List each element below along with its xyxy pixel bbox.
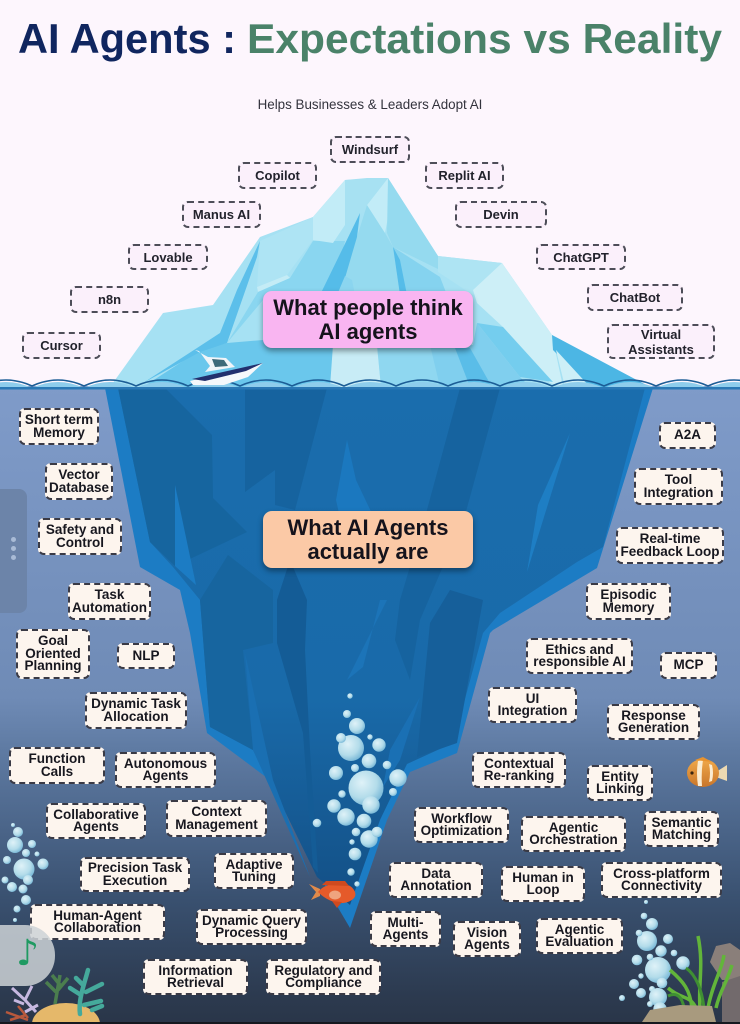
tag: Dynamic Task Allocation: Allocation <box>103 708 169 724</box>
tag: UI Integration <box>488 687 577 723</box>
tag: ChatGPT <box>536 244 626 270</box>
tag: UI Integration: Integration <box>498 703 567 718</box>
icon: orange fish <box>309 881 355 908</box>
tag: Agentic Orchestration <box>521 816 626 852</box>
tag: Regulatory and Compliance: Regulatory and <box>274 963 373 978</box>
tag: Semantic Matching: Semantic <box>651 815 712 830</box>
tag: Episodic Memory: Episodic <box>600 587 657 602</box>
tag: Goal Oriented Planning <box>16 629 90 679</box>
tag: MCP <box>660 652 717 679</box>
tag: Autonomous Agents: Agents <box>143 768 188 783</box>
tag: Task Automation: Automation <box>72 600 147 614</box>
tag: Agentic Evaluation: Evaluation <box>545 934 614 949</box>
tag: Function Calls: Calls <box>41 764 73 778</box>
tag: Tool Integration: Integration <box>644 484 713 500</box>
tag: NLP: NLP <box>132 648 160 663</box>
tag: Episodic Memory: Memory <box>603 600 654 614</box>
heading: what people think <box>263 291 473 348</box>
tag: Ethics and responsible AI <box>526 638 633 674</box>
tag: Regulatory and Compliance <box>266 959 381 995</box>
tag: Contextual Re-ranking: Contextual <box>484 756 554 771</box>
tag: Response Generation <box>607 704 700 740</box>
tag: Autonomous Agents <box>115 752 216 788</box>
side handle overlay <box>0 489 27 613</box>
tag: Devin: Devin <box>483 207 519 222</box>
tag: Windsurf <box>330 136 410 163</box>
tag: Human in Loop: Human in <box>512 870 574 885</box>
tag: Dynamic Task Allocation: Dynamic Task <box>91 696 181 711</box>
tag: Precision Task Execution: Precision Task <box>88 860 182 875</box>
tag: Virtual Assistants: Assistants <box>628 342 694 356</box>
tag: Context Management: Context <box>191 804 242 819</box>
tag: Data Annotation: Annotation <box>400 878 472 893</box>
tag: Cross-platform Connectivity: Connectivity <box>621 878 702 893</box>
tag: Vector Database: Vector <box>58 467 100 482</box>
tag: ChatBot: ChatBot <box>610 290 660 305</box>
tag: Response Generation: Response <box>621 708 686 723</box>
tag: Human-Agent Collaboration: Human-Agent <box>53 908 142 923</box>
tag: Short term Memory <box>19 408 99 445</box>
tag: Response Generation: Generation <box>618 720 689 735</box>
tag: Tool Integration: Tool <box>665 472 692 487</box>
tag: Vision Agents: Vision <box>467 925 507 940</box>
tag: Real-time Feedback Loop: Real-time <box>640 531 700 546</box>
tag: Entity Linking <box>587 765 653 801</box>
tag: Contextual Re-ranking <box>472 752 566 788</box>
left bubbles <box>2 823 48 922</box>
tag: Entity Linking: Entity <box>601 769 639 784</box>
tag: Goal Oriented Planning: Oriented <box>25 646 81 661</box>
tag: Dynamic Task Allocation <box>85 692 187 729</box>
tag: Copilot <box>238 162 317 189</box>
title <box>18 15 723 62</box>
tag: Vector Database: Database <box>49 480 109 494</box>
tag: Function Calls: Function <box>28 751 86 766</box>
tag: Context Management <box>166 800 267 837</box>
tag: Cursor: Cursor <box>40 338 83 353</box>
panel: what people think tags <box>22 136 715 359</box>
tag: Autonomous Agents: Autonomous <box>124 756 207 771</box>
heading: what AI agents actually are <box>263 511 473 568</box>
tag: Adaptive Tuning: Tuning <box>232 869 276 884</box>
icon: music note button: ♪ <box>16 933 39 974</box>
tag: Vision Agents: Agents <box>464 937 510 952</box>
tag: n8n: n8n <box>98 292 121 307</box>
heading: what people think: AI agents <box>318 318 418 344</box>
tag: Safety and Control: Safety and <box>46 522 114 537</box>
tag: Multi-Agents: Agents <box>383 927 428 942</box>
tag: UI Integration: UI <box>526 691 539 706</box>
tag: Entity Linking: Linking <box>596 781 644 796</box>
title: AI Agents : <box>18 15 236 62</box>
heading: what people think: What people think <box>273 294 463 320</box>
tag: Agentic Orchestration: Agentic <box>549 820 598 835</box>
tag: ChatGPT: ChatGPT <box>553 250 609 264</box>
tag: Cross-platform Connectivity <box>601 862 722 898</box>
tag: Safety and Control <box>38 518 122 555</box>
panel: what AI agents actually are tags <box>9 408 724 995</box>
iceberg below water <box>105 388 653 928</box>
tag: Cross-platform Connectivity: Cross-platform <box>613 866 710 881</box>
tag: Human-Agent Collaboration <box>30 904 165 940</box>
icon: rocks and seaweed <box>642 936 740 1022</box>
bottom edge bar <box>0 1022 740 1024</box>
icon: clownfish <box>687 757 727 787</box>
tag: Data Annotation: Data <box>421 866 451 881</box>
tag: Semantic Matching: Matching <box>652 827 711 842</box>
tag: Manus AI: Manus AI <box>193 207 250 222</box>
tag: Collaborative Agents: Agents <box>73 819 119 834</box>
tag: Short term Memory: Short term <box>25 412 93 427</box>
tag: Precision Task Execution: Execution <box>103 872 167 888</box>
tag: Workflow Optimization: Workflow <box>431 811 492 826</box>
tag: Information Retrieval: Retrieval <box>167 975 224 990</box>
tag: Dynamic Query Processing: Dynamic Query <box>202 913 301 928</box>
tag: ChatBot <box>587 284 683 311</box>
tag: Replit AI: Replit AI <box>438 168 491 183</box>
tag: Human-Agent Collaboration: Collaboration <box>54 920 141 935</box>
tag: Goal Oriented Planning: Planning <box>24 658 82 673</box>
tag: Precision Task Execution <box>80 857 190 892</box>
tag: n8n <box>70 286 149 313</box>
heading: what AI agents actually are: What AI Agents <box>288 514 448 540</box>
tag: Safety and Control: Control <box>56 534 104 550</box>
tag: Multi-Agents <box>370 911 441 947</box>
tag: Task Automation <box>68 583 151 620</box>
tag: Lovable <box>128 244 208 270</box>
iceberg above water <box>110 178 650 387</box>
tag: Collaborative Agents: Collaborative <box>53 807 139 822</box>
tag: Lovable: Lovable <box>143 250 193 264</box>
icon: boat <box>190 350 263 385</box>
tag: Information Retrieval: Information <box>158 963 233 978</box>
tag: Devin <box>455 201 547 228</box>
tag: Agentic Evaluation <box>536 918 623 954</box>
tag: Ethics and responsible AI: responsible AI <box>533 654 626 669</box>
tag: Information Retrieval <box>143 959 248 995</box>
tag: Regulatory and Compliance: Compliance <box>285 975 362 990</box>
ocean background <box>0 386 740 1022</box>
tag: Human in Loop: Loop <box>526 882 559 897</box>
central bubbles <box>313 693 407 887</box>
tag: NLP <box>117 643 175 669</box>
tag: A2A <box>659 422 716 449</box>
tag: Tool Integration <box>634 468 723 505</box>
tag: Multi-Agents: Multi- <box>387 915 423 930</box>
tag: Data Annotation <box>389 862 483 898</box>
tag: Real-time Feedback Loop <box>616 527 724 564</box>
title: Expectations vs Reality <box>247 15 723 62</box>
tag: Adaptive Tuning <box>214 853 294 889</box>
tag: Vector Database <box>45 463 113 500</box>
tag: Virtual Assistants: Virtual <box>641 326 681 342</box>
tag: Virtual Assistants <box>607 324 715 359</box>
tag: Ethics and responsible AI: Ethics and <box>545 642 614 657</box>
tag: Dynamic Query Processing: Processing <box>215 925 288 940</box>
icon: coral reef <box>6 970 102 1024</box>
tag: Human in Loop <box>501 866 585 902</box>
heading: what AI agents actually are: actually are <box>307 538 429 564</box>
tag: Vision Agents <box>453 921 521 957</box>
tag: Episodic Memory <box>586 583 671 620</box>
bottom-right bubbles <box>619 900 690 1016</box>
tag: Short term Memory: Memory <box>33 424 85 440</box>
subtitle: Helps Businesses & Leaders Adopt AI <box>258 97 482 112</box>
tag: Function Calls <box>9 747 105 784</box>
tag: Real-time Feedback Loop: Feedback Loop <box>620 544 720 558</box>
tag: Agentic Evaluation: Agentic <box>555 922 604 937</box>
tag: Replit AI <box>425 162 504 189</box>
tag: Copilot: Copilot <box>255 168 300 183</box>
waves at waterline <box>0 380 740 390</box>
tag: Goal Oriented Planning: Goal <box>38 633 68 648</box>
tag: Windsurf: Windsurf <box>342 142 398 157</box>
tag: Cursor <box>22 332 101 359</box>
tag: Workflow Optimization <box>414 807 509 843</box>
tag: Dynamic Query Processing <box>196 909 307 945</box>
tag: Task Automation: Task <box>95 587 124 602</box>
tag: MCP: MCP <box>674 657 704 672</box>
tag: Workflow Optimization: Optimization <box>421 823 502 838</box>
tag: Collaborative Agents <box>46 803 146 839</box>
tag: Contextual Re-ranking: Re-ranking <box>484 768 554 783</box>
tag: A2A: A2A <box>674 427 701 442</box>
tag: Manus AI <box>182 201 261 228</box>
icon: music note button <box>0 925 55 986</box>
tag: Semantic Matching <box>644 811 719 847</box>
tag: Context Management: Management <box>175 816 258 832</box>
tag: Adaptive Tuning: Adaptive <box>225 857 282 872</box>
tag: Agentic Orchestration: Orchestration <box>529 832 618 847</box>
